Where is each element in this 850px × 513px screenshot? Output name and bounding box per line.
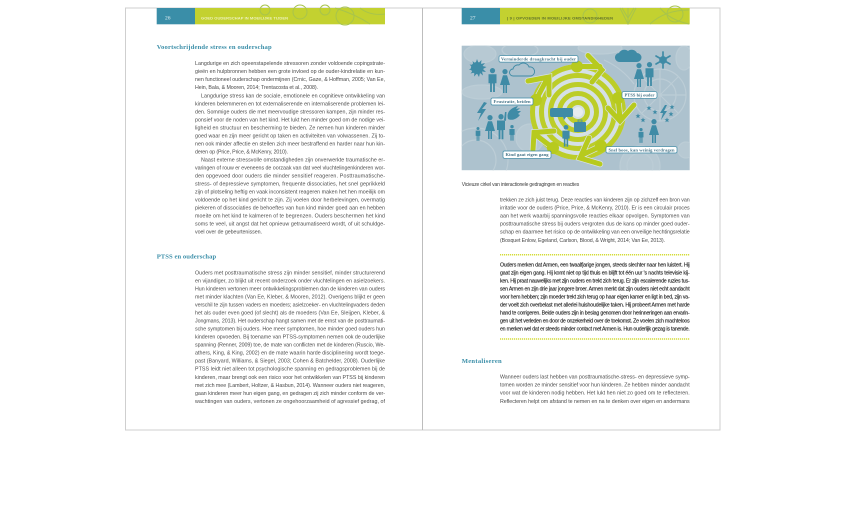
figure: vicious circle illustration <box>462 46 690 170</box>
text block: continued paragraph: schap en daarmee het risico op de ontwikkeling van een onveilige hechtingsrelatie <box>500 230 690 236</box>
icon: stars <box>636 104 674 122</box>
running header left: GOED OUDERSCHAP IN MOEILIJKE TIJDEN <box>201 16 288 21</box>
case box: Armen: der voelt zich overbelast met allerlei huishoudelijke taken. Hij probeert Armen met harde <box>500 302 690 308</box>
text block: PTSS paragraph: PTSS leidt niet alleen tot psychologische spanning en gedragsproblemen bij de <box>195 367 385 373</box>
text block: PTSS paragraph: athers, King, & King, 2002) en de mate waarin harde disciplinering wordt toege- <box>195 351 385 357</box>
icon: parents right <box>634 62 654 87</box>
icon: child and mother <box>639 119 659 143</box>
text block: continued paragraph: posttraumatische stress bij ouders vergroten dus de kans op minder goed ouder- <box>500 221 690 227</box>
icon: lightning right <box>660 105 667 120</box>
label: Frustratie, beiden: Frustratie, beiden <box>494 99 531 104</box>
text block: stress paragraphs: nen ook minder affectie en stellen zich meer bestraffend en harder naar hun kin- <box>195 141 385 147</box>
text block: stress paragraphs: zijn of plotseling heftig en vaak inconsistent reageren maken het hen moeilijk om <box>195 190 386 196</box>
text block: stress paragraphs: Hein, Bala, & Mooren, 2014; Trentacosta et al., 2008). <box>195 85 318 91</box>
text block: stress paragraphs: voldoende op het kind gericht te zijn. Zij voelen door herbelevingen, overmatig <box>195 198 385 204</box>
text block: PTSS paragraph: wachtingen van ouders, vertonen ze ongehoorzaamheid of agressief gedrag, of <box>195 399 386 405</box>
text block: stress paragraphs: varingen of rouw er eveneens de oorzaak van dat veel vluchtelingenkinderen wor- <box>195 166 385 172</box>
figure caption: Vicieuze cirkel van interactionele gedragingen en reacties <box>462 182 580 188</box>
text block: PTSS paragraph: het als ouder even goed (of slecht) als de moeders (Van Ee, Sleijpen, Kleber, & <box>195 311 385 317</box>
case box: Armen: ken. Hij praat nauwelijks met zijn ouders en trekt zich terug. Er zijn escalerende ruzies tus- <box>500 278 690 284</box>
text block: stress paragraphs: piekeren of dissociaties de behoeftes van hun kind minder goed aan en hebben <box>195 206 385 212</box>
text block: stress paragraphs: voel over de gebeurtenissen. <box>195 230 262 236</box>
label: Frustratie, beiden <box>491 98 533 105</box>
label: Verminderde draagkracht: Verminderde draagkracht bij ouder <box>501 56 576 61</box>
icon: filled cloud <box>615 50 642 62</box>
heading: PTSS en ouderschap: PTSS en ouderschap <box>157 254 217 260</box>
icon: outline cloud <box>510 63 535 76</box>
label: PTSS bij ouder <box>622 92 657 98</box>
text block: PTSS paragraph: verschil te zijn tussen vaders en moeders; asielzoeker- en vluchtelingvaders deden <box>195 303 385 309</box>
text block: Mentaliseren paragraph: voor wat de kinderen nodig hebben. Het lukt hen niet zo goed om te reflecteren. <box>500 391 690 397</box>
right page header band <box>462 6 690 24</box>
text block: continued paragraph: (Bosquet Enlow, Egeland, Carlson, Blood, & Wright, 2014; Van Ee, 2013). <box>500 238 665 244</box>
text block: continued paragraph <box>500 197 690 244</box>
text block: stress paragraphs: gieën en hulpbronnen hebben een grote invloed op de ouder-kindrelatie en kun- <box>195 69 385 75</box>
heading: Mentaliseren: Mentaliseren <box>462 358 502 365</box>
text block: PTSS paragraph: sche symptomen bij ouders. Hoe meer symptomen, hoe minder goed ouders hun <box>195 327 385 333</box>
text block: continued paragraph: aan het werk waarbij spanningsvolle reacties elkaar opvolgen. Symptomen van <box>500 213 690 219</box>
icon: starburst <box>469 59 486 77</box>
text block: stress paragraphs: ponsief voor de noden van het kind. Het lukt hen minder goed om de nodige vei- <box>195 117 385 123</box>
case box: Armen: en merken wel dat er steeds minder contact met Armen is. Hun ouderlijk gezag is tanende. <box>500 327 690 333</box>
text block: PTSS paragraph: Hun kinderen vertonen meer ontwikkelingsproblemen dan de kinderen van ouders <box>195 286 385 292</box>
icon: hand <box>507 106 521 120</box>
label: PTSS bij ouder: PTSS bij ouder <box>624 92 654 97</box>
icon: speech bubble <box>550 108 573 120</box>
page frame <box>126 8 720 430</box>
text block: stress paragraphs: Langdurige stress kan de sociale, emotionele en cognitieve ontwikkeling van <box>201 93 385 99</box>
text block: PTSS paragraph: Ouders met posttraumatische stress zijn minder sensitief, minder structurerend <box>195 270 385 276</box>
text block: PTSS paragraph <box>195 270 386 405</box>
spiral rings <box>530 64 626 160</box>
text block: stress paragraphs: stress- of depressieve symptomen, frequente dissociaties, het snel geprikkeld <box>195 182 385 188</box>
text block: stress paragraphs: goed waar en zijn meer gericht op taken en activiteiten van volwassenen. Zij to- <box>195 133 385 139</box>
arrow: right <box>608 92 634 121</box>
case box: Armen <box>500 262 690 333</box>
case box: Armen: hand te corrigeren. Beide ouders zijn in beslag genomen door herinneringen aan ervarin- <box>500 310 690 316</box>
text block: stress paragraphs: nen functioneel ouderschap ondermijnen (Crnic, Gaze, & Hoffman, 2005; Van Ee, <box>195 77 385 83</box>
text block: Mentaliseren paragraph <box>500 375 690 405</box>
text block: PTSS paragraph: spanning (Renner, 2009) toe, de mate van conflicten met de kinderen (Ruscio, We- <box>195 343 385 349</box>
text block: PTSS paragraph: gaan kinderen meer hun eigen gang, en gedragen zij zich minder conform de ver- <box>195 391 385 397</box>
icon: parents left <box>488 68 510 93</box>
text block: stress paragraphs <box>195 61 386 236</box>
text block: stress paragraphs: den opgevoed door ouders die minder sensitief reageren. Posttraumatische- <box>195 174 385 180</box>
case box: Armen: gaat zijn eigen gang. Hij komt niet op tijd thuis en blijft tot één uur 's nachts televisie kij- <box>500 270 690 276</box>
page number 26: 26 <box>165 16 171 22</box>
label: Kind gaat eigen gang <box>503 151 551 158</box>
text block: continued paragraph: irritatie voor de ouders (Price, Price, & McKenry, 2010). Er is een circulair proces <box>500 205 690 211</box>
text block: stress paragraphs: soms te veel, uit angst dat het opnieuw getraumatiseerd wordt, of uit schuldge- <box>195 222 385 228</box>
text block: stress paragraphs: Naast externe stressvolle omstandigheden zijn onverwerkte traumatische er- <box>201 158 385 164</box>
arrow: upper left <box>528 77 549 106</box>
icon: family <box>476 112 515 141</box>
text block: PTSS paragraph: kinderen, maar brengt ook een risico voor het ontwikkelen van PTSS bij kinderen <box>195 375 385 381</box>
label: Kind gaat eigen gang: Kind gaat eigen gang <box>506 152 549 157</box>
text block: Mentaliseren paragraph: Wanneer ouders last hebben van posttraumatische-stress- en depressieve symp- <box>500 375 690 381</box>
running header right: | 9 | OPVOEDEN IN MOEILIJKE OMSTANDIGHEDEN <box>507 16 613 21</box>
left page header band <box>157 5 385 25</box>
icon: child with suitcase <box>562 120 586 147</box>
arrow: lower left <box>533 131 559 154</box>
arrow: bottom <box>580 138 607 164</box>
icon: lightning left <box>477 102 487 121</box>
text block: PTSS paragraph: kinderen opvoeden. Bij toename van PTSS-symptomen nemen ook de ouderlijke <box>195 335 385 341</box>
text block: stress paragraphs: moeite om het kind te kalmeren of te begrenzen. Ouders beschermen het kind <box>195 214 385 220</box>
arrow: top <box>571 56 602 82</box>
text block: continued paragraph: trekken ze zich juist terug. Deze reacties van kinderen zijn op zichzelf een bron van <box>500 197 690 203</box>
text block: PTSS paragraph: met zich mee (Lambert, Holtzer, & Hasbun, 2014). Wanneer ouders niet reageren, <box>195 383 385 389</box>
text block: stress paragraphs: deren op (Price, Price, & McKenry, 2010). <box>195 150 288 156</box>
heading: Voortschrijdende stress en ouderschap: Voortschrijdende stress en ouderschap <box>157 44 272 51</box>
text block: stress paragraphs: kinderen belemmeren en tot externaliserende en internaliserende problemen lei- <box>195 101 385 107</box>
case box: Armen: Ouders merken dat Armen, een twaalfjarige jongen, steeds slechter naar hen luistert. Hij <box>500 262 690 268</box>
text block: stress paragraphs: Langdurige en zich opeenstapelende stressoren zonder voldoende copingstrate- <box>195 61 385 67</box>
text block: Mentaliseren paragraph: Reflecteren helpt om afstand te nemen en na te denken over eigen en andermans <box>500 399 690 405</box>
text block: PTSS paragraph: Jongmans, 2013). Het ouderschap hangt samen met de ernst van de posttraumati- <box>195 319 385 325</box>
case box: Armen: sen Armen en zijn drie jaar jongere broer. Armen merkt dat zijn ouders niet echt aandacht <box>500 286 690 292</box>
text block: stress paragraphs: ligheid en structuur en bescherming te bieden. Ze nemen hun kinderen minder <box>195 125 385 131</box>
text block: PTSS paragraph: met minder klachten (Van Ee, Kleber, & Mooren, 2012). Overigens blijkt er geen <box>195 295 385 301</box>
case box: Armen: voor hem hebben; zijn moeder trekt zich terug op haar eigen kamer en ligt in bed, zijn va- <box>500 294 690 300</box>
case box: Armen: gen uit het verleden en door de onzekerheid over de toekomst. Ze voelen zich machteloos <box>500 319 690 325</box>
background pattern <box>462 46 690 170</box>
text block: PTSS paragraph: past (Banyard, Williams, & Siegel, 2003; Cohen & Batchelder, 2008). Ouderlijke <box>195 359 385 365</box>
text block: stress paragraphs: den. Sommige ouders die met meervoudige stressoren kampen, zijn minder res- <box>195 109 385 115</box>
page number 27: 27 <box>470 16 476 22</box>
text block: Mentaliseren paragraph: tomen worden ze minder sensitief voor hun kinderen. Ze hebben minder aandacht <box>500 383 690 389</box>
icon: snowflake <box>656 52 670 68</box>
text block: PTSS paragraph: en vijandiger, zo blijkt uit recent onderzoek onder vluchtelingen en asielzoekers. <box>195 278 385 284</box>
label: Snel boos: Snel boos, kan weinig verdragen <box>608 147 675 152</box>
